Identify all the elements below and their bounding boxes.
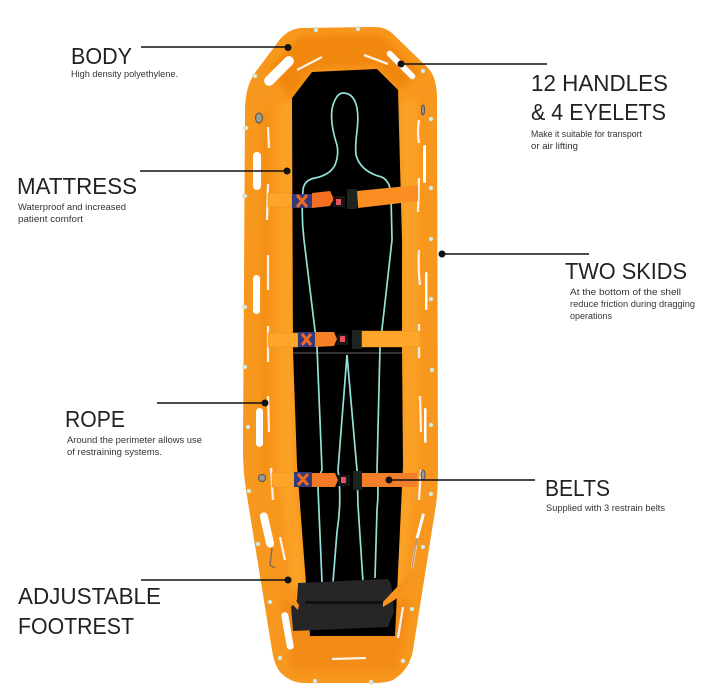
label: handles and eyelets: & 4 EYELETS <box>531 99 666 125</box>
label: two skids: reduce friction during dragging <box>570 299 695 309</box>
label: two skids: TWO SKIDS <box>565 258 687 284</box>
leader: rope <box>157 400 268 406</box>
shell tonal shading <box>262 34 420 672</box>
label: body: High density polyethylene. <box>71 69 178 79</box>
label: handles and eyelets: Make it suitable for transport <box>531 129 642 139</box>
belt lower <box>272 471 417 490</box>
leader: belts <box>386 476 535 484</box>
rope segments <box>267 55 421 659</box>
orange shell <box>243 27 438 683</box>
leader: mattress <box>140 168 290 174</box>
label: body: BODY <box>71 43 132 69</box>
eyelets <box>256 105 425 482</box>
leader: body <box>141 44 292 51</box>
label: mattress: Waterproof and increased <box>18 202 126 212</box>
belt middle <box>268 330 420 349</box>
teal body outline <box>302 93 392 582</box>
belt upper <box>268 185 418 209</box>
label: belts: BELTS <box>545 475 610 501</box>
label: belts: Supplied with 3 restrain belts <box>546 503 666 513</box>
label: mattress <box>17 173 137 224</box>
rivets <box>243 27 434 684</box>
label: handles and eyelets: 12 HANDLES <box>531 70 668 96</box>
label: mattress: MATTRESS <box>17 173 137 199</box>
leader: handles <box>398 60 547 68</box>
label: two skids: At the bottom of the shell <box>570 287 681 297</box>
footrest <box>270 538 417 631</box>
mattress joint <box>293 352 402 354</box>
label: handles and eyelets <box>531 70 668 151</box>
leader: two skids <box>438 250 589 258</box>
label: adjustable footrest: FOOTREST <box>18 613 134 639</box>
label: rope: Around the perimeter allows use <box>67 435 202 445</box>
label: adjustable footrest: ADJUSTABLE <box>18 583 161 609</box>
label: two skids <box>565 258 695 321</box>
black mattress <box>292 69 403 636</box>
leader: footrest <box>141 576 292 584</box>
label: mattress: patient comfort <box>18 214 84 224</box>
label: two skids: operations <box>570 311 612 321</box>
label: body <box>71 43 178 79</box>
label: rope: ROPE <box>65 406 125 432</box>
stretcher illustration <box>243 27 438 684</box>
label: adjustable footrest <box>18 583 161 639</box>
carrying handles <box>253 49 428 650</box>
label: rope: of restraining systems. <box>67 447 162 457</box>
label: belts <box>545 475 666 513</box>
label: rope <box>65 406 202 457</box>
label: handles and eyelets: or air lifting <box>531 141 578 151</box>
